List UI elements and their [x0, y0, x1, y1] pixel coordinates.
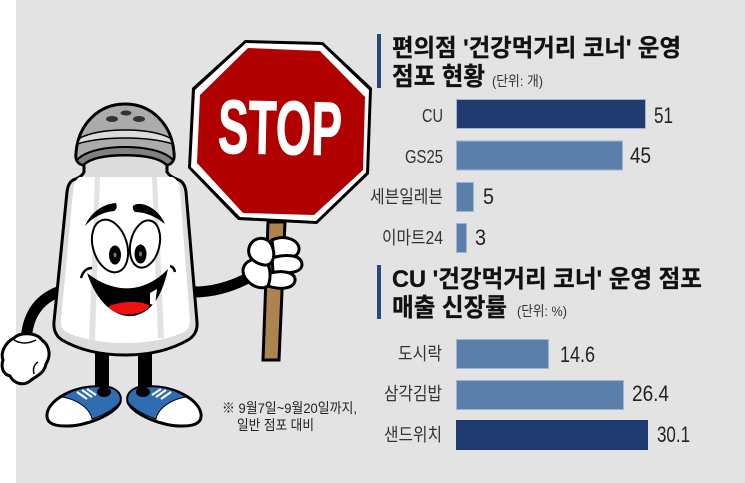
tongue — [108, 302, 150, 314]
category labels: 이마트24 — [382, 228, 443, 248]
values — [560, 342, 690, 447]
sign red face — [197, 48, 365, 215]
illustration: salt shaker mascot — [2, 104, 246, 426]
bars — [456, 340, 624, 410]
bars — [456, 100, 646, 252]
stop sign with pole — [188, 40, 372, 360]
pole — [263, 222, 285, 360]
panel: sales growth chart — [377, 265, 702, 450]
footnote — [222, 400, 357, 433]
right shoe — [128, 387, 201, 426]
heading — [392, 35, 681, 91]
shaker cap — [76, 104, 174, 165]
heading: CU '건강먹거리 코너' 운영 점포 — [392, 266, 702, 293]
heading accent bar — [377, 34, 381, 88]
right arm — [194, 279, 246, 292]
sign octagon outer edge — [188, 40, 372, 224]
category labels: 삼각김밥 — [384, 384, 442, 404]
heading: 점포 현황 — [392, 63, 485, 91]
values — [475, 103, 673, 250]
heading — [392, 266, 702, 322]
sign word: STOP — [217, 85, 343, 172]
heading accent bar — [377, 265, 381, 319]
teeth glint — [150, 289, 157, 305]
values: 3 — [475, 225, 486, 250]
panel: store count chart — [370, 34, 681, 252]
left arm — [26, 292, 58, 342]
values: 5 — [483, 184, 494, 209]
eyebrows — [85, 203, 165, 226]
footnote: 일반 점포 대비 — [237, 417, 314, 433]
category labels: 샌드위치 — [384, 425, 442, 445]
values: 45 — [630, 143, 651, 168]
category labels: CU — [422, 106, 443, 126]
face — [81, 203, 175, 316]
category labels — [384, 344, 442, 445]
heading: 매출 신장률 — [392, 294, 507, 322]
category labels: GS25 — [405, 147, 443, 167]
left shoe — [47, 387, 120, 426]
sign white border — [191, 43, 369, 221]
shaker body outline — [54, 155, 197, 355]
eyes — [86, 215, 134, 277]
unit note: (단위: %) — [517, 303, 567, 319]
category labels: 세븐일레븐 — [370, 187, 443, 207]
category labels — [370, 106, 443, 248]
mouth — [87, 269, 168, 316]
values: 51 — [654, 103, 673, 128]
left hand — [2, 334, 49, 384]
values: 14.6 — [560, 342, 595, 367]
category labels: 도시락 — [398, 344, 442, 364]
values: 30.1 — [657, 422, 690, 447]
heading: 편의점 '건강먹거리 코너' 운영 — [392, 35, 681, 62]
shaker body highlight — [61, 177, 190, 343]
values: 26.4 — [632, 381, 669, 406]
shaker stripes — [89, 177, 164, 341]
right hand — [243, 238, 302, 288]
footnote: ※ 9월7일~9월20일까지, — [222, 400, 357, 416]
unit note: (단위: 개) — [492, 73, 543, 89]
legs — [95, 350, 152, 395]
